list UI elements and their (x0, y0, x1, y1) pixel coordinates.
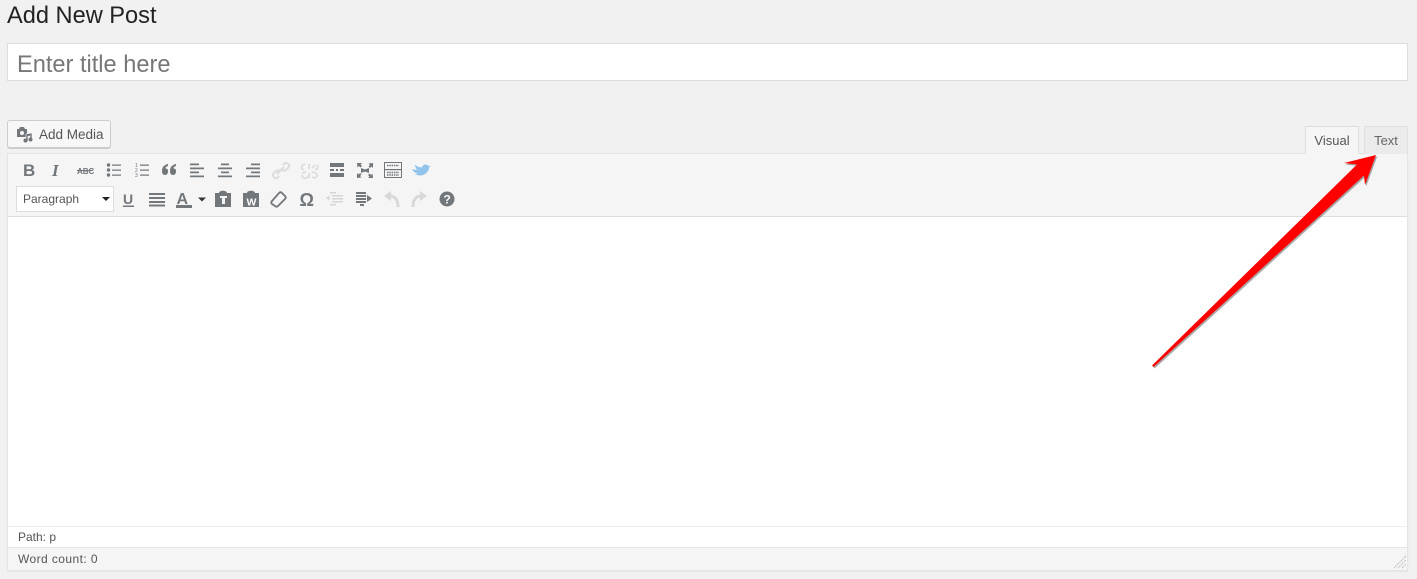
editor frame (7, 153, 1408, 571)
word mark: W (246, 196, 256, 208)
tab: Text (1364, 126, 1408, 154)
icon: media (17, 127, 32, 142)
icon: numbered list: 2 (135, 168, 138, 174)
toolbar row two icons (123, 190, 454, 210)
icon: bullet list (107, 163, 121, 177)
tab: Visual: Visual (1314, 133, 1350, 148)
icon: link (273, 163, 289, 178)
word count bar (8, 548, 1407, 570)
icon: omega: Ω (300, 190, 314, 210)
icon: bold: B (23, 161, 35, 180)
path status bar: Path: p (18, 530, 56, 544)
title input (7, 43, 1408, 81)
icon: strikethrough: ABC (77, 167, 95, 176)
icon: toolbar toggle keyboard (384, 162, 402, 178)
icon: help: ? (444, 192, 451, 206)
icon: read more (330, 163, 344, 177)
icon: blockquote (162, 164, 176, 175)
icon: paste from word (243, 191, 259, 207)
toolbar panel (8, 154, 1407, 217)
icon: indent (356, 192, 372, 206)
icon: unlink (302, 164, 318, 178)
toolbar row one icons (23, 161, 430, 180)
paragraph select: Paragraph (23, 192, 79, 206)
icon: justify (149, 193, 165, 206)
add media button (7, 120, 111, 148)
icon: redo (413, 191, 427, 207)
icon: help (440, 192, 454, 206)
arrow body (1152, 155, 1376, 367)
tab: Text: Text (1374, 133, 1398, 148)
title input: Enter title here (17, 52, 170, 78)
tab: Visual (1305, 126, 1359, 154)
icon: align left (190, 164, 204, 177)
arrow shadow (1153, 156, 1377, 368)
icon: numbered list: 3 (135, 173, 138, 179)
icon: undo (384, 191, 398, 207)
icon: outdent (326, 192, 343, 206)
add media button: Add Media (39, 127, 104, 142)
icon: underline: U (123, 191, 133, 207)
resize handle (1394, 556, 1406, 568)
red arrow pointing to Text tab (1152, 155, 1378, 368)
icon: eraser (271, 192, 286, 207)
icon: dropdown caret (102, 197, 110, 201)
page title: Add New Post (7, 3, 157, 29)
icon: paste as text (215, 191, 231, 207)
icon: align right (246, 164, 260, 177)
icon: numbered list: 1 (135, 163, 138, 169)
icon: text color: A (176, 191, 188, 208)
icon: italic: I (51, 161, 60, 180)
icon: numbered list (135, 163, 149, 179)
icon: twitter bird (412, 164, 430, 176)
word count bar: Word count: 0 (18, 552, 98, 566)
icon: fullscreen (357, 163, 373, 178)
path status bar (8, 526, 1407, 548)
icon: align center (218, 164, 232, 177)
paragraph select (16, 186, 114, 212)
icon: text color (176, 191, 206, 208)
